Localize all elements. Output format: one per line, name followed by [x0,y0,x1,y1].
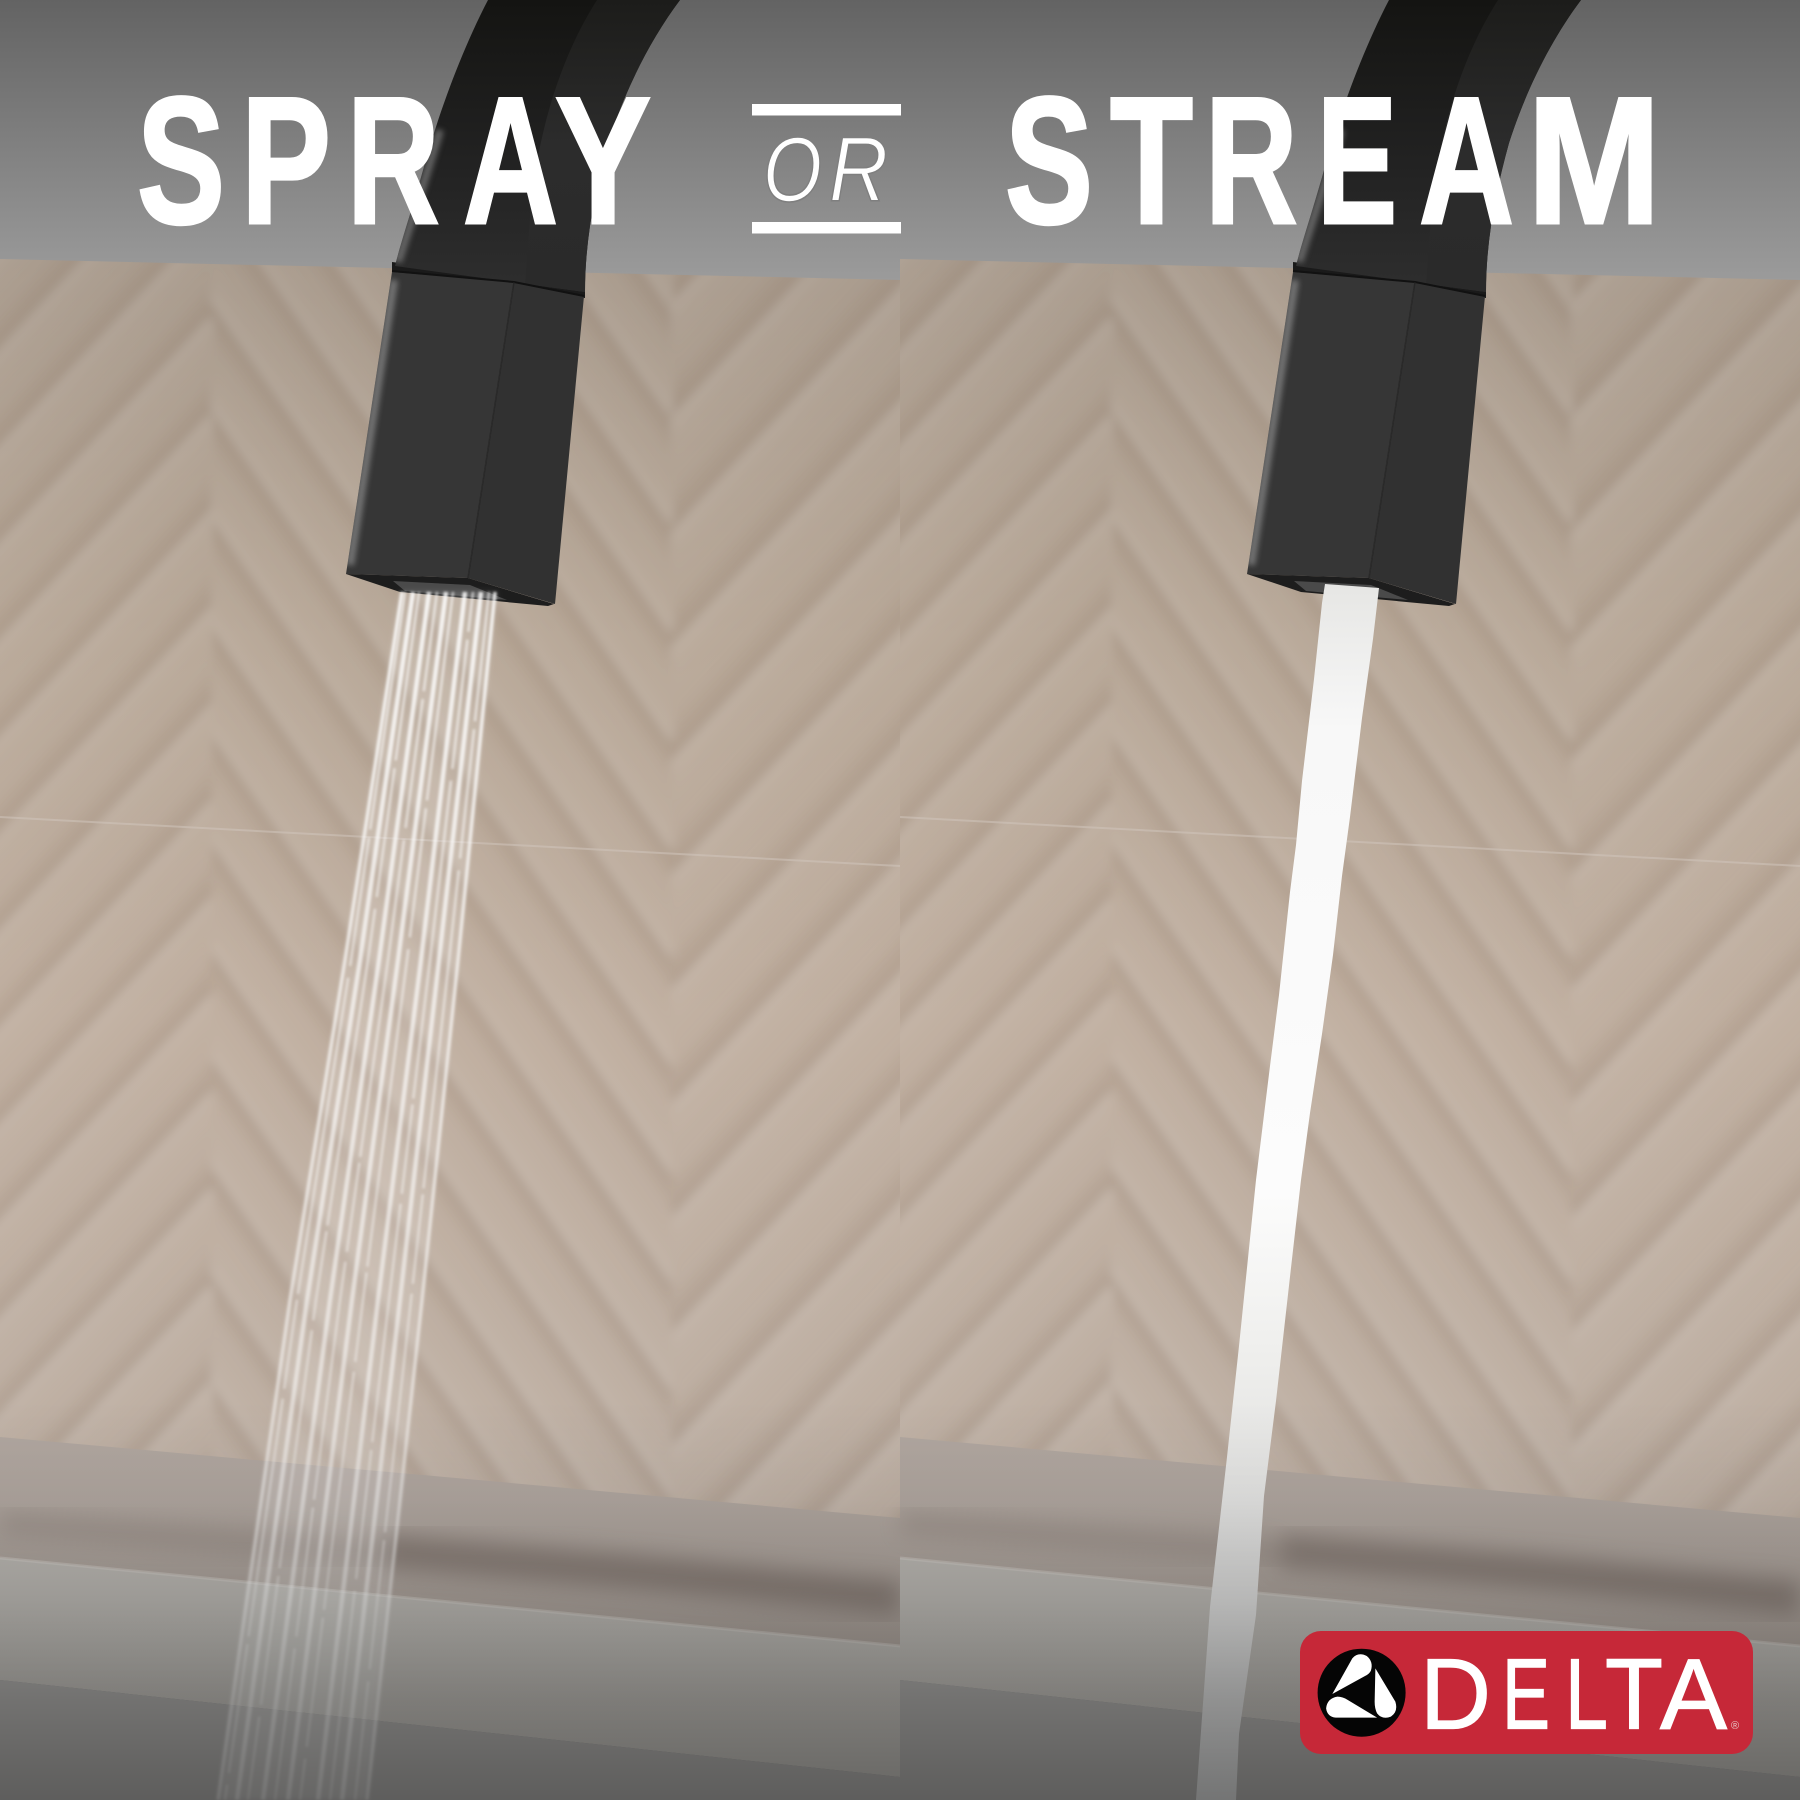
title: STREAM: A [1419,60,1514,262]
title: SPRAY: A [463,60,558,262]
title: SPRAY: Y [555,60,651,262]
icon: stream faucet head [1247,0,1581,606]
title: STREAM: M [1527,60,1661,262]
spray water strands [218,592,497,1800]
title: STREAM: S [1005,60,1093,262]
logo: Delta badge: E [1502,1638,1550,1750]
logo: Delta badge: L [1565,1638,1608,1750]
title: STREAM: R [1205,60,1298,262]
panel: stream background wall and counter [890,0,1800,1800]
icon: spray faucet head [346,0,680,606]
divider: OR badge [752,104,901,234]
title: SPRAY: R [347,60,440,262]
logo: Delta badge [1300,1631,1753,1754]
title: STREAM: T [1110,60,1193,262]
panel: spray background wall and counter [0,0,912,1800]
title: SPRAY: P [241,60,331,262]
divider: OR badge: R [829,119,888,221]
bottom vignette [0,1400,1800,1800]
title: STREAM: E [1317,60,1397,262]
divider: OR badge: O [763,119,822,221]
title: SPRAY: S [137,60,225,262]
logo: Delta badge: D [1420,1638,1491,1750]
logo: Delta badge: T [1605,1638,1663,1750]
logo: Delta badge: A [1660,1638,1727,1750]
stream of water [1196,584,1379,1800]
logo: Delta badge: ® [1731,1720,1739,1732]
